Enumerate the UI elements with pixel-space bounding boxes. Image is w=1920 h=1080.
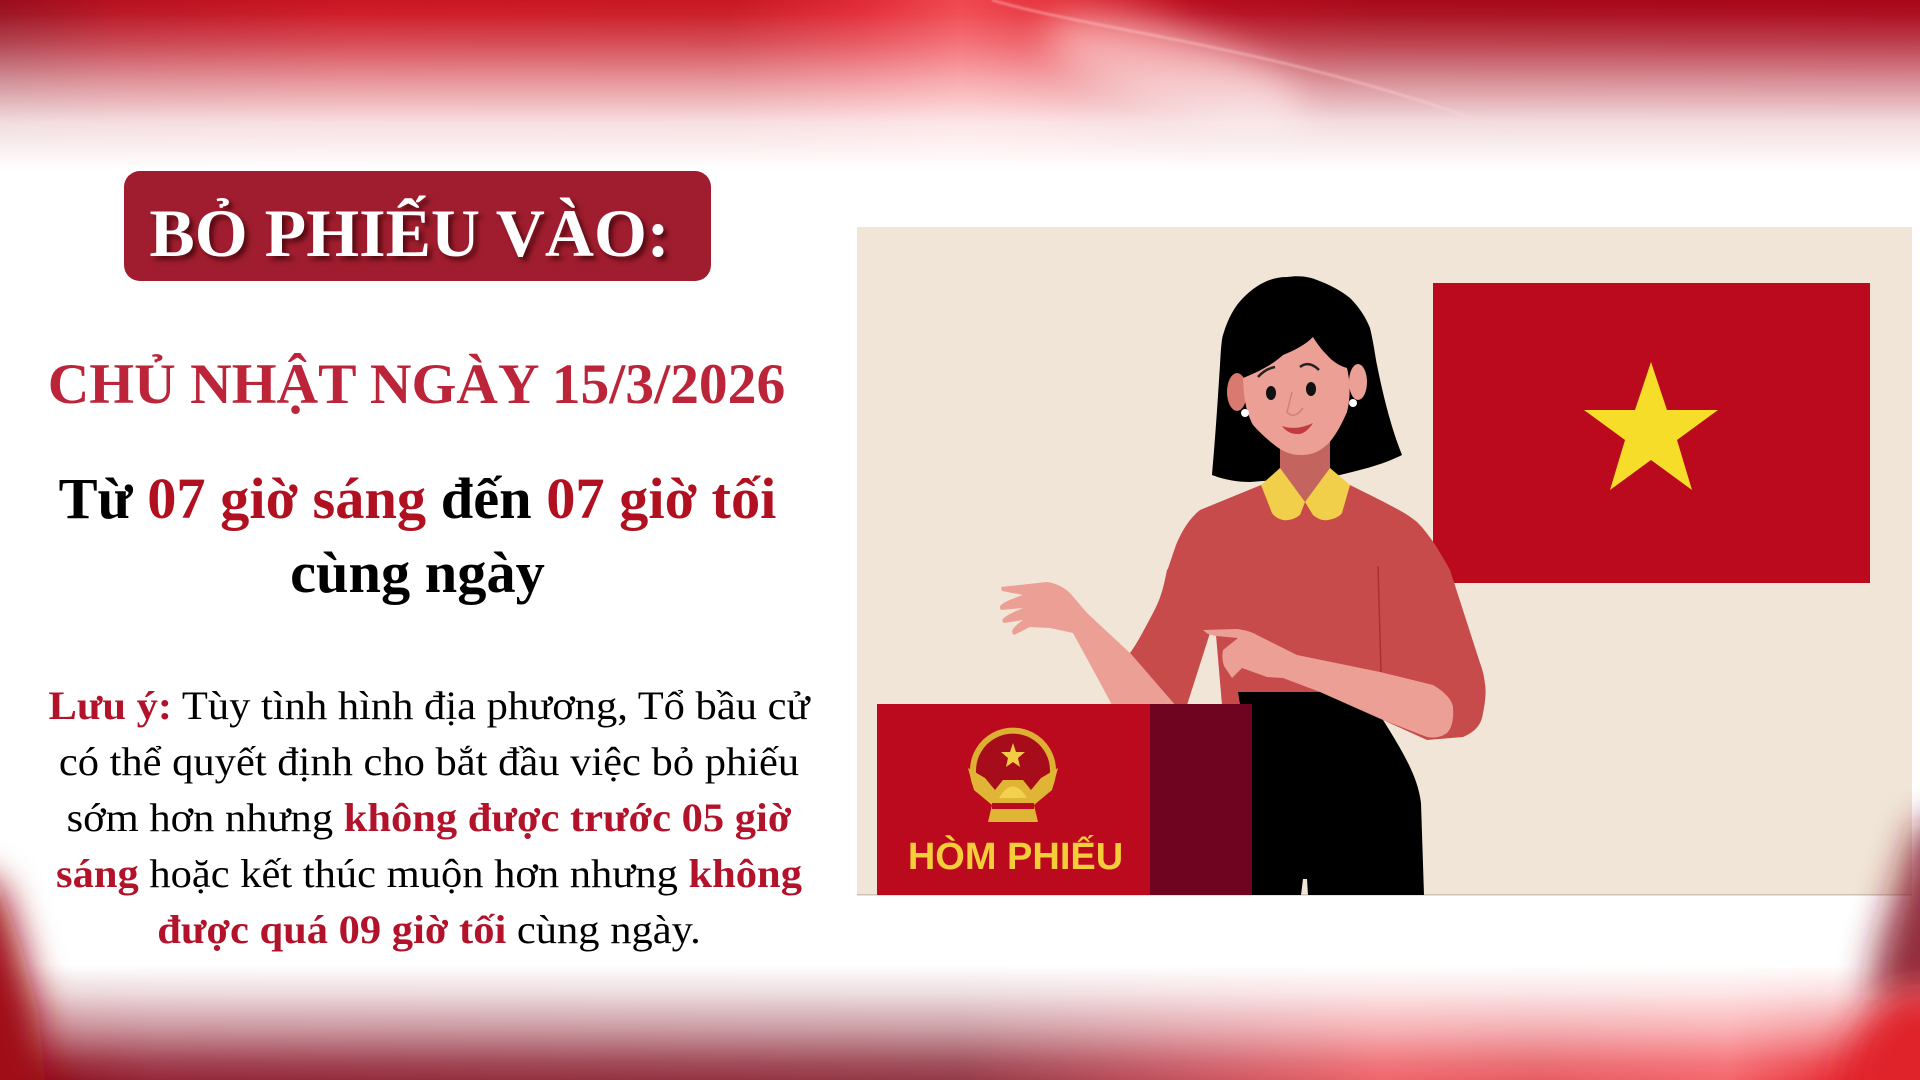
- ballot box: [877, 704, 1252, 895]
- note paragraph: Lưu ý: Tùy tình hình địa phương, Tổ bầu cử: [48, 683, 810, 728]
- date heading: CHỦ NHẬT NGÀY 15/3/2026: [48, 353, 785, 416]
- flag: [1433, 283, 1870, 583]
- time range text: [59, 466, 776, 605]
- note paragraph: được quá 09 giờ tối cùng ngày.: [157, 907, 701, 952]
- time range text: cùng ngày: [290, 540, 545, 605]
- box label: HÒM PHIẾU: [908, 834, 1123, 878]
- badge text: BỎ PHIẾU VÀO:: [149, 195, 670, 271]
- note paragraph: sáng hoặc kết thúc muộn hơn nhưng không: [56, 851, 802, 896]
- note paragraph: sớm hơn nhưng không được trước 05 giờ: [67, 795, 791, 840]
- emblem: [968, 731, 1058, 822]
- heading badge: BỎ PHIẾU VÀO: [124, 171, 711, 281]
- woman figure: [1000, 276, 1486, 895]
- note paragraph: [48, 683, 811, 952]
- time range text: Từ 07 giờ sáng đến 07 giờ tối: [59, 466, 776, 531]
- note paragraph: có thể quyết định cho bắt đầu việc bỏ phiếu: [59, 739, 799, 784]
